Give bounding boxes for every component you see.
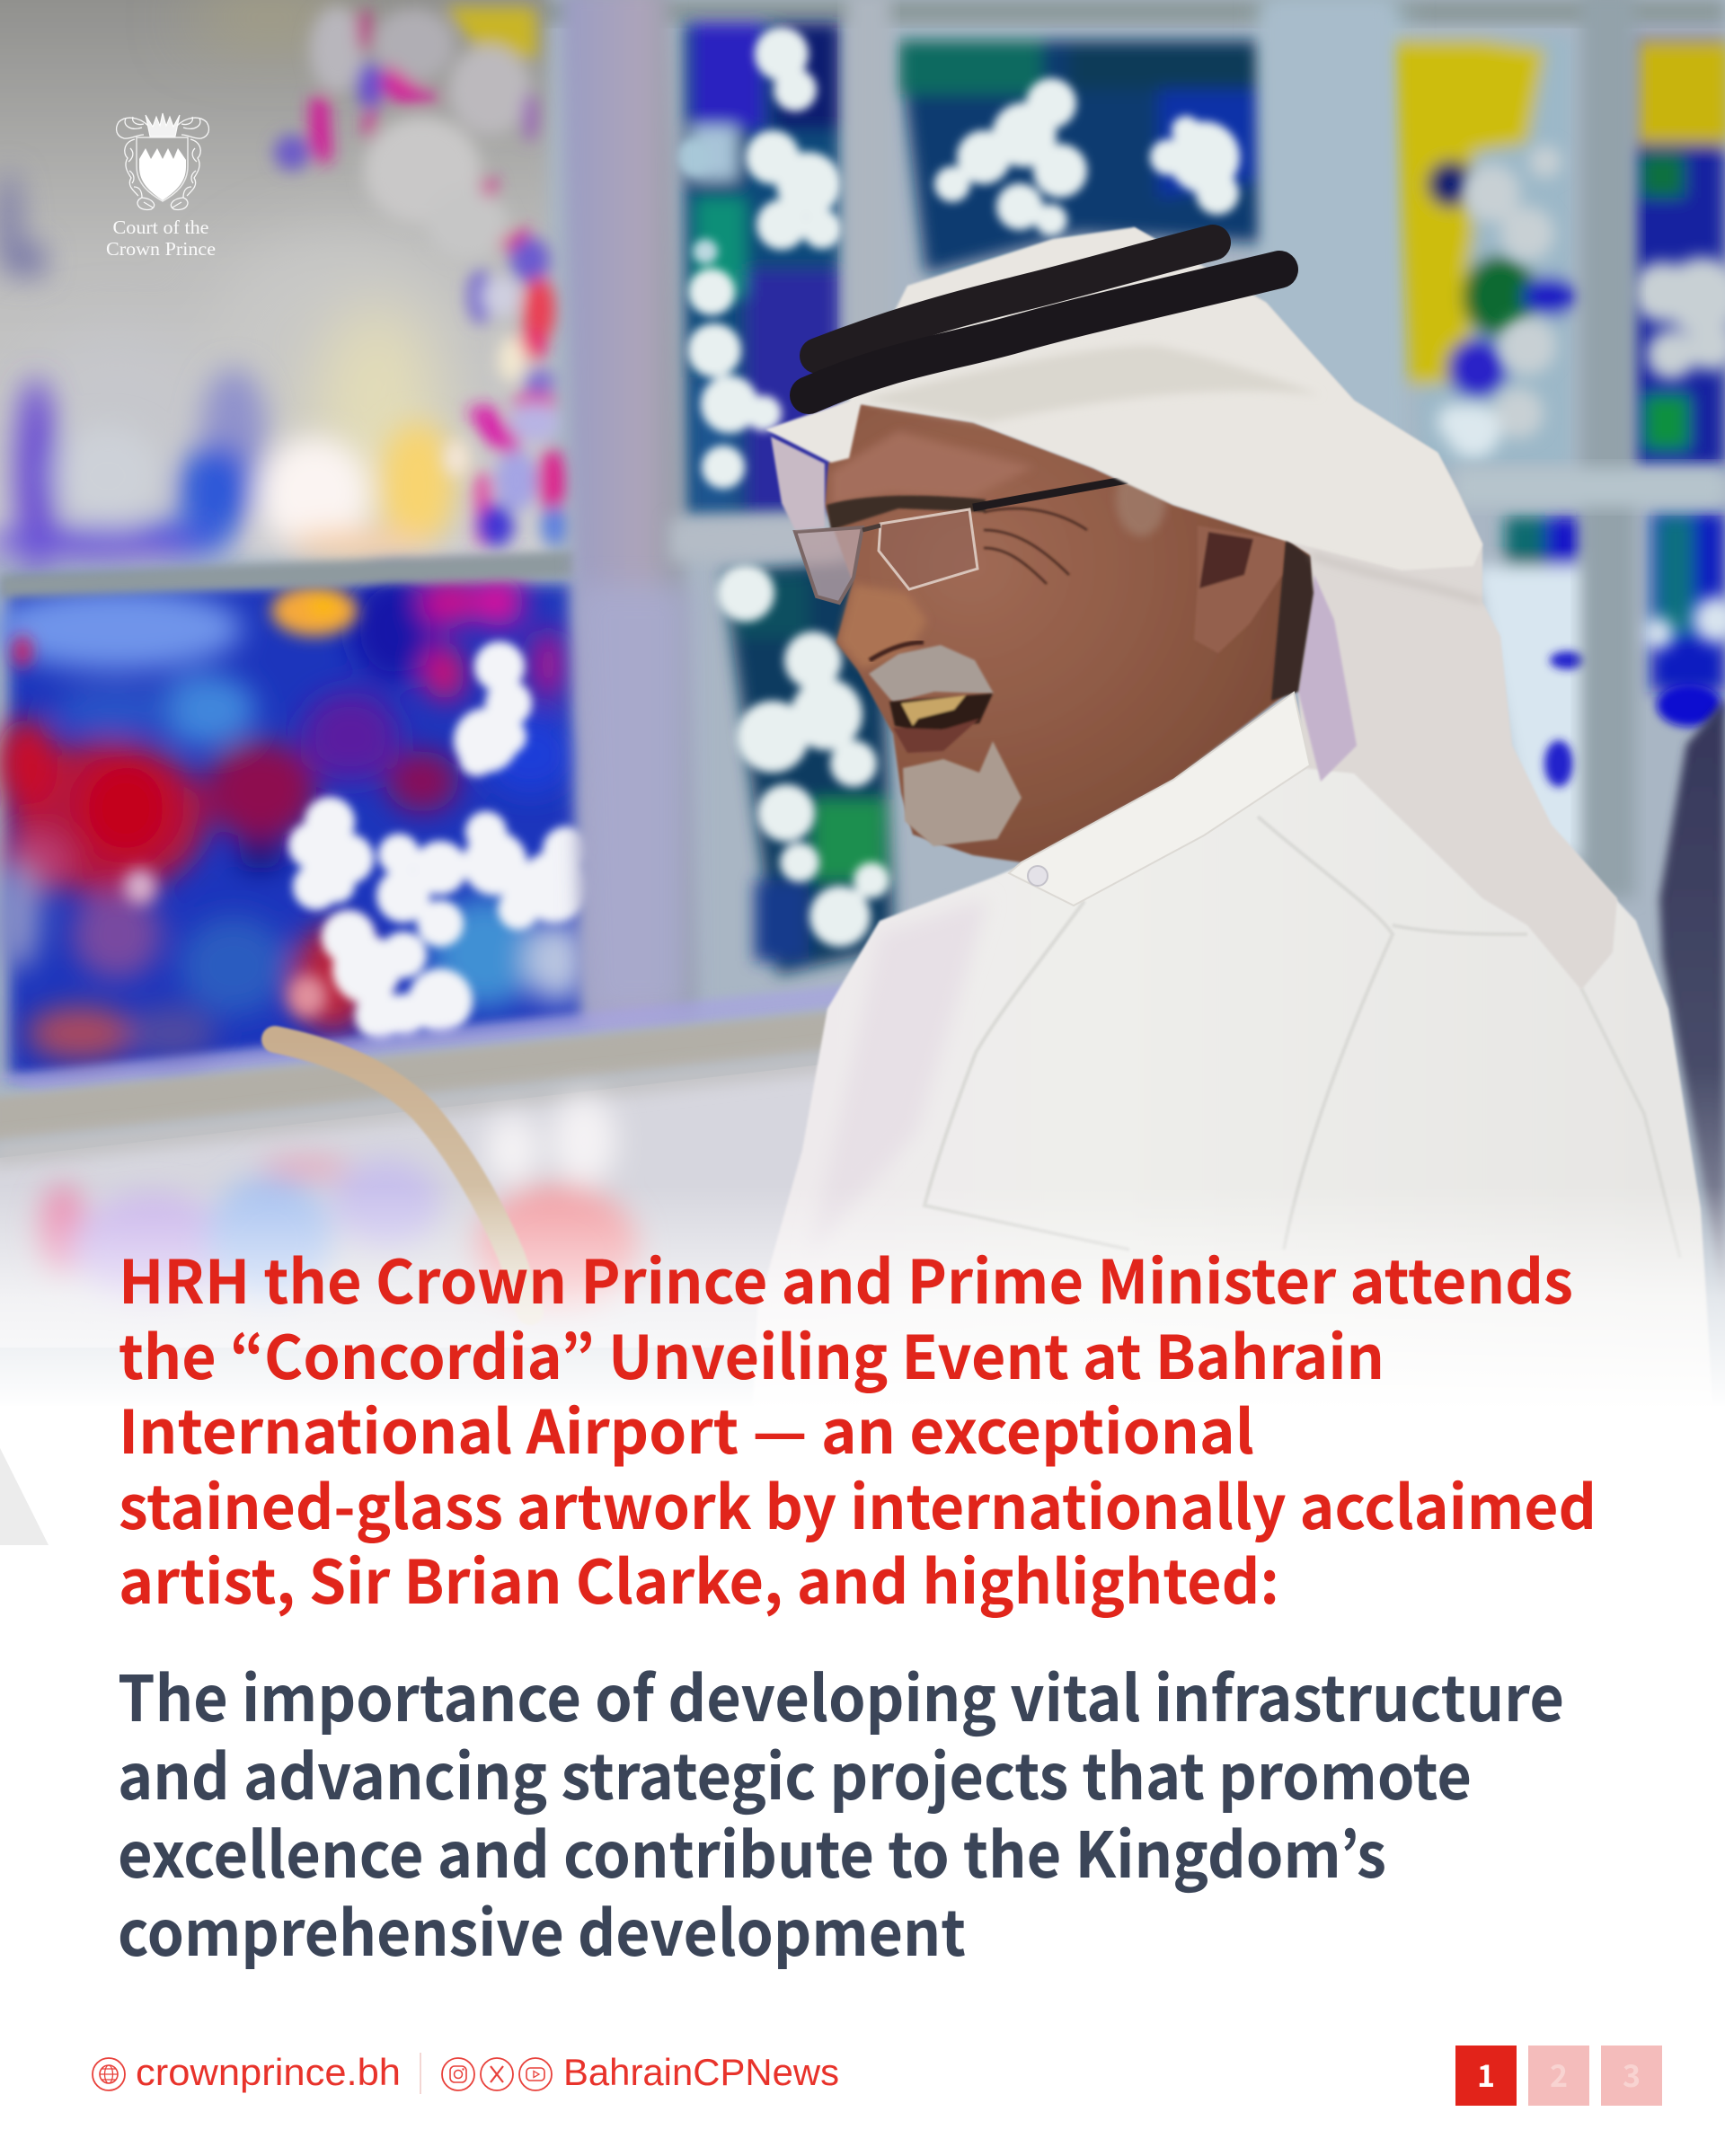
- mouth: [889, 694, 993, 753]
- forehead highlight: [831, 431, 1033, 508]
- sub-heading in slate: excellence and contribute to the Kingdom’s: [118, 1806, 1386, 1896]
- window: orange glow: [13, 586, 358, 1018]
- glasses: [795, 480, 1128, 603]
- website label: crownprince.bh: [136, 2051, 401, 2093]
- page 2: 2: [1550, 2052, 1568, 2096]
- mantling: [117, 117, 208, 209]
- eyebrow: [827, 496, 986, 530]
- sub-heading in slate: The importance of developing vital infrastructure: [118, 1649, 1564, 1740]
- collar: [1009, 693, 1310, 906]
- heading in red: [119, 1234, 1597, 1621]
- ghutra lavender shadow: [1298, 575, 1357, 782]
- agal: black head cord: [809, 243, 1279, 395]
- ghutra top over head: [765, 227, 1482, 570]
- dark figure at right edge: [1659, 699, 1725, 1312]
- crow's feet: [984, 508, 1087, 584]
- heading in red: International Airport — an exceptional: [119, 1384, 1254, 1471]
- logo: Court of the Crown Prince: [106, 113, 216, 260]
- thobe shading: [924, 817, 1680, 1258]
- window: central glass panels: [683, 22, 1262, 975]
- logo: Court of the Crown Prince: Crown Prince: [106, 238, 216, 260]
- heading in red: the “Concordia” Unveiling Event at Bahrain: [119, 1310, 1384, 1397]
- ghutra fold shadow: [862, 345, 1321, 422]
- wooden handle: [275, 1039, 530, 1312]
- photo: man in white thobe and ghutra: [746, 227, 1721, 1545]
- page 2: [1528, 2046, 1589, 2106]
- sub-heading in slate: [118, 1649, 1564, 1975]
- moustache: [869, 645, 994, 702]
- icon: instagram: [442, 2058, 474, 2090]
- logo wordmark: Court of the: [113, 216, 208, 238]
- page 3: [1601, 2046, 1662, 2106]
- window: white glass blobs, lower-left: [288, 641, 590, 1040]
- window: upper-left white and magenta lace: [274, 6, 567, 547]
- sub-heading in slate: comprehensive development: [118, 1884, 966, 1975]
- window: right glass panels with yellow: [1393, 36, 1725, 862]
- icon: youtube: [519, 2058, 552, 2090]
- ghutra lavender fold near forehead: [771, 437, 825, 530]
- drape crease: [1312, 555, 1482, 602]
- heading in red: HRH the Crown Prince and Prime Minister attends: [119, 1234, 1573, 1321]
- window: white glass blobs, centre: [676, 27, 1240, 947]
- heading in red: stained-glass artwork by internationally acclaimed: [119, 1460, 1597, 1547]
- thobe: [746, 683, 1721, 1545]
- window: frame mullions: [0, 0, 1725, 1024]
- hair behind ear: [1271, 539, 1314, 701]
- white fade panel: [0, 1186, 1725, 2156]
- photo: stained-glass background: [0, 0, 1725, 1545]
- crown: [146, 113, 180, 137]
- icon: X: [481, 2058, 513, 2090]
- page 3: 3: [1623, 2052, 1641, 2096]
- ghutra drape behind head: [1078, 227, 1617, 990]
- window: white glass blobs, right: [1438, 146, 1725, 649]
- shield: [137, 137, 188, 201]
- nostril: [870, 642, 924, 660]
- neck and face: [825, 403, 1310, 862]
- window: upper-left glass panel: [0, 0, 548, 575]
- ear: [1194, 526, 1285, 653]
- goatee: [903, 741, 1022, 846]
- faint triangle at left edge: [0, 1448, 49, 1545]
- thobe soft shadow: [809, 898, 988, 1258]
- page 1 active: 1: [1477, 2052, 1495, 2096]
- handle label: BahrainCPNews: [563, 2051, 839, 2093]
- page 1 active: [1455, 2046, 1517, 2106]
- footer: website and social links: [93, 2051, 839, 2094]
- collar button: [1028, 866, 1048, 886]
- window: blue spots in pale panel: [1544, 651, 1721, 787]
- sub-heading in slate: and advancing strategic projects that promote: [118, 1727, 1472, 1818]
- heading in red: artist, Sir Brian Clarke, and highlighted:: [119, 1534, 1279, 1621]
- handrail: [0, 984, 862, 1348]
- temple wrinkles: [1116, 461, 1166, 536]
- pagination squares: [1455, 2046, 1662, 2106]
- divider: [420, 2053, 421, 2094]
- coat of arms: [117, 113, 208, 209]
- shield white serrated field: [139, 148, 186, 200]
- nose highlight: [838, 584, 927, 669]
- window: lower-left glass panel: [9, 584, 588, 1078]
- floor reflections: [40, 1096, 638, 1312]
- icon: globe: [93, 2058, 125, 2090]
